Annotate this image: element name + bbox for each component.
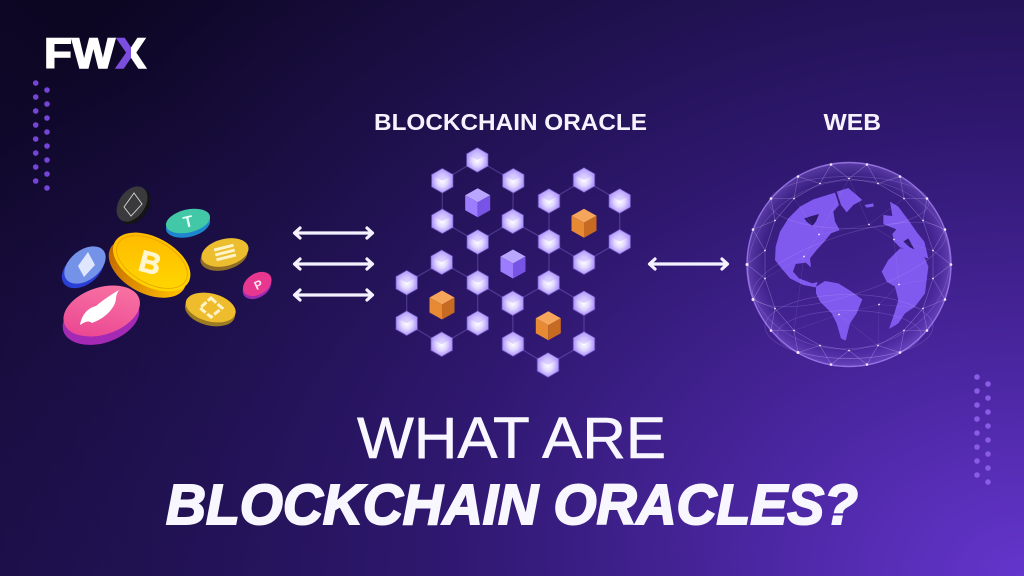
- network mesh: [737, 163, 961, 366]
- logo: FWX: [44, 30, 146, 78]
- coin: Polkadot: P: [252, 277, 265, 293]
- network links: [407, 160, 620, 365]
- title line 1: WHAT ARE: [357, 406, 666, 471]
- logo: FWX: FW: [44, 30, 115, 78]
- coin: Ethereum: [55, 239, 113, 296]
- bidirectional arrow: oracle to web: [650, 259, 728, 269]
- continents: [775, 188, 928, 341]
- coin: Bitcoin: B: [135, 245, 165, 282]
- mesh nodes: [746, 163, 952, 366]
- diagram: blockchain oracle hexagon network: [396, 148, 630, 377]
- coin: Tether: [163, 205, 213, 242]
- coin: Polkadot: [238, 267, 276, 304]
- bidirectional arrows: coins to oracle: [294, 228, 372, 300]
- coin: EOS: [110, 181, 157, 230]
- coin: Bitcoin: [99, 220, 200, 310]
- coin: pink rabbit token: [56, 276, 147, 354]
- title line 2: BLOCKCHAIN ORACLES?: [166, 473, 858, 537]
- dot pattern: bottom right: [974, 374, 991, 485]
- coin: Solana: [197, 234, 252, 275]
- orange core cubes: [430, 209, 596, 340]
- interior mesh: [765, 178, 933, 346]
- coin: Tether: T: [182, 213, 195, 232]
- crypto coins cluster: [55, 181, 276, 354]
- logo: FWX: X: [116, 30, 146, 78]
- limb mesh: [747, 164, 951, 364]
- purple core cubes: [465, 188, 526, 278]
- globe sphere: [747, 162, 951, 366]
- orbit arcs: [737, 167, 961, 362]
- globe: [737, 162, 961, 366]
- heading: web: WEB: [824, 109, 881, 135]
- dot pattern: top left: [33, 80, 50, 191]
- coin: Binance: [182, 288, 239, 331]
- glowing node cubes: [396, 148, 630, 377]
- heading: blockchain oracle: BLOCKCHAIN ORACLE: [374, 109, 647, 135]
